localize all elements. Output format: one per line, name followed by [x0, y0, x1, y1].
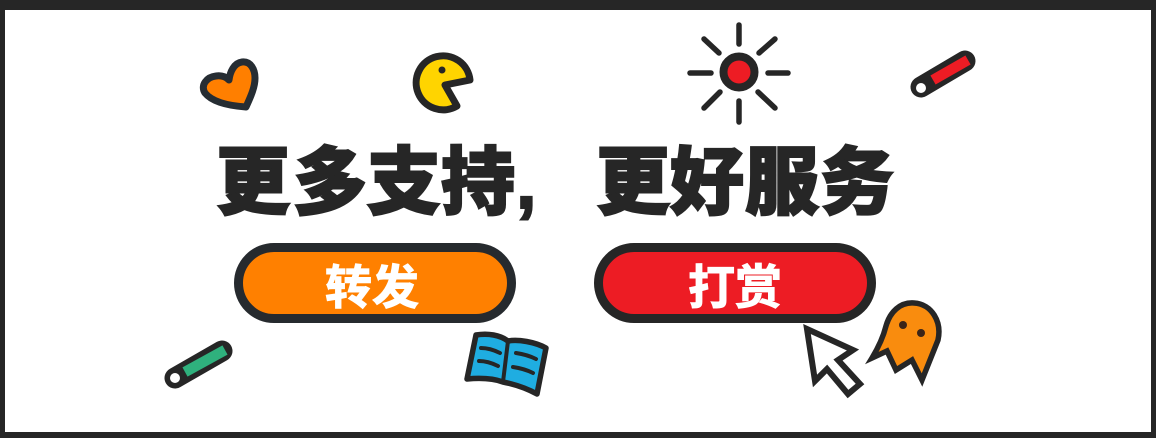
label: share: 转发: [325, 261, 419, 314]
icon: green pencil: [170, 350, 225, 383]
icon: open book: [467, 334, 546, 394]
icon: ghost: [872, 303, 939, 380]
title: 更多支持,更好服务: [216, 141, 894, 224]
icon: heart: [203, 62, 255, 107]
icon: sun: [690, 25, 788, 122]
icon: cursor arrow: [807, 329, 860, 394]
button: tip: [598, 248, 872, 318]
icon: pacman: [416, 56, 470, 110]
label: tip: 打赏: [688, 261, 782, 314]
icon: red pencil: [916, 60, 968, 93]
button: share: [238, 248, 512, 318]
